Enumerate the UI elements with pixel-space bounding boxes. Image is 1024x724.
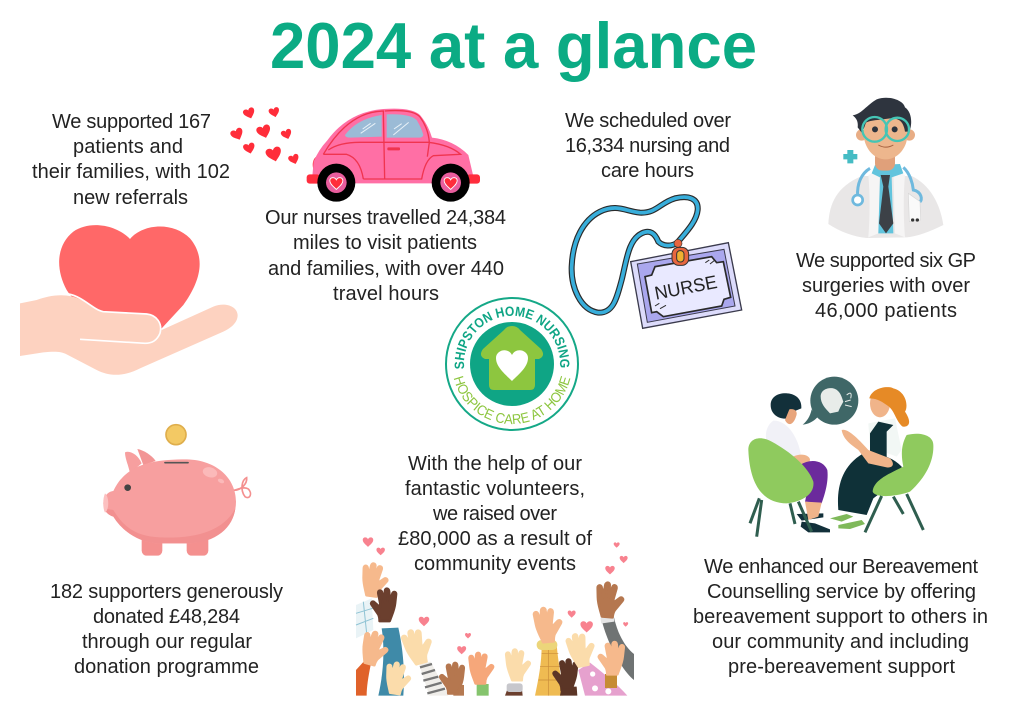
text block: community fundraising: £80,000 as a result of [398,528,592,550]
logo: Shipston Home Nursing [445,297,579,431]
text block: bereavement support: our community and including [712,631,969,653]
icon: pink car with hearts [229,107,480,202]
small hearts [363,537,628,654]
text block: regular donations [50,581,283,678]
text block: GP surgeries [796,250,976,322]
icon: doctor [828,98,943,238]
text block: patients supported: their families, with 102 [32,161,230,183]
text block: community fundraising: fantastic volunteers, [405,478,585,500]
text block: GP surgeries: We supported six GP [796,250,976,272]
text block: nursing hours: 16,334 nursing and [565,135,730,157]
text block: bereavement support: bereavement support to others in [693,606,988,628]
text block: GP surgeries: 46,000 patients [815,300,957,322]
right person [830,387,933,532]
text block: bereavement support [693,556,988,678]
text block: regular donations: donated £48,284 [93,606,240,628]
text block: nurses travelled: miles to visit patients [293,232,477,254]
hearts [229,107,301,166]
text block: bereavement support: We enhanced our Bereavement [704,556,978,578]
icon: raised hands [356,537,634,696]
text block: community fundraising [398,453,592,575]
icon: counselling session [748,377,933,537]
text block: regular donations: donation programme [74,656,259,678]
text block: bereavement support: Counselling service by offering [707,581,976,603]
badge label: NURSE [653,271,719,304]
title: 2024 at a glance [270,9,757,82]
text block: nurses travelled: Our nurses travelled 24,384 [265,207,506,229]
text block: patients supported: We supported 167 [52,111,211,133]
logo name: SHIPSTON HOME NURSING [454,306,570,369]
text block: community fundraising: we raised over [432,503,557,525]
text block: patients supported [32,111,230,209]
text block: patients supported: patients and [73,136,183,158]
speech bubble [803,377,858,425]
text block: GP surgeries: surgeries with over [802,275,970,297]
icon: piggy bank with coin [103,425,251,556]
hands [359,562,624,695]
text block: nurses travelled [265,207,506,305]
text block: nursing hours: care hours [601,160,694,182]
text block: regular donations: 182 supporters generously [50,581,283,603]
text block: nursing hours: We scheduled over [565,110,731,132]
text block: nursing hours [565,110,731,182]
text block: nurses travelled: travel hours [333,283,439,305]
text block: community fundraising: With the help of our [408,453,582,475]
text block: bereavement support: pre-bereavement support [728,656,955,678]
text block: patients supported: new referrals [73,187,188,209]
left person [748,393,830,537]
logo tagline: HOSPICE CARE AT HOME [454,376,570,424]
text block: community fundraising: community events [414,553,576,575]
text block: regular donations: through our regular [82,631,252,653]
icon: hand holding heart [20,225,238,375]
icon: nurse lanyard and badge [572,197,742,328]
text block: nurses travelled: and families, with over 440 [268,258,504,280]
